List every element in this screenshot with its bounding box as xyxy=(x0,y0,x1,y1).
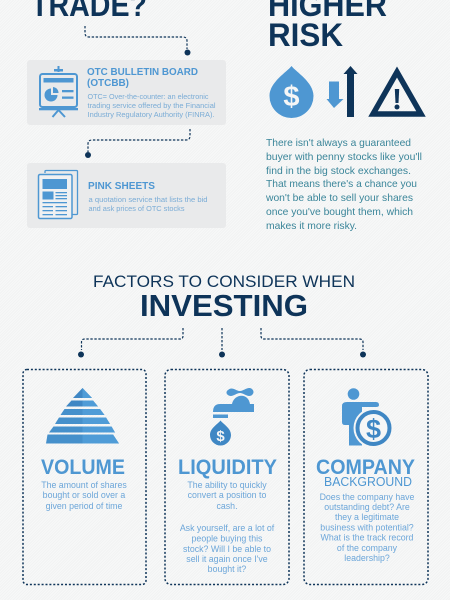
connector: investing to company xyxy=(261,328,366,358)
text: OTCBB description: Industry Regulatory Authority (FINRA). xyxy=(88,110,214,119)
text: liquidity description: The ability to quickly xyxy=(187,480,267,490)
text: higher risk description: makes it more risky. xyxy=(266,220,357,232)
text: higher risk description: once you've bought them, which xyxy=(266,206,413,218)
text: OTCBB title: (OTCBB) xyxy=(87,78,129,89)
text: liquidity description: Ask yourself, are a lot of xyxy=(180,523,275,533)
panel: pink sheets xyxy=(27,163,226,228)
panel: liquidity xyxy=(165,370,289,584)
text: OTCBB description: OTC= Over-the-counter: an electronic xyxy=(88,92,209,101)
icon: faucet with money drop xyxy=(210,388,254,446)
text: liquidity description: bought it? xyxy=(208,564,246,574)
icon: warning triangle xyxy=(373,72,421,114)
text: liquidity description: stock? Will I be able to xyxy=(183,544,271,554)
icon: businessman with coin xyxy=(342,388,394,448)
text: background subtitle: BACKGROUND xyxy=(324,474,412,489)
panel: company background xyxy=(304,370,428,584)
text: company description: leadership? xyxy=(344,553,390,563)
text: liquidity title: LIQUIDITY xyxy=(178,456,277,479)
text: liquidity description: convert a position to xyxy=(188,490,266,500)
text: higher risk description: buyer with penny stocks like you'll xyxy=(266,151,422,163)
text: OTCBB description: trading service offered by the Financial xyxy=(88,101,216,110)
icon: up arrow xyxy=(344,66,358,117)
text: volume description: given period of time xyxy=(46,501,122,511)
icon: money drop xyxy=(270,66,314,118)
text: company description: Does the company have xyxy=(320,492,415,502)
text: company description: What is the track record xyxy=(321,532,414,542)
icon: presentation board xyxy=(39,66,78,117)
text: OTCBB title: OTC BULLETIN BOARD xyxy=(87,67,198,78)
text: pink sheets description: a quotation service that lists the bid xyxy=(88,195,208,204)
panel: OTC bulletin board xyxy=(27,60,226,125)
text: volume description: bought or sold over a xyxy=(43,490,125,500)
icon: pyramid xyxy=(46,388,119,444)
icon: down arrow xyxy=(326,82,344,108)
text: pink sheets description: and ask prices of OTC stocks xyxy=(88,204,185,213)
icon: businessman with coin: $ xyxy=(366,414,381,444)
text: company description: outstanding debt? Are xyxy=(324,502,410,512)
text: company description: business with potential? xyxy=(320,522,414,532)
text: liquidity description: people buying this xyxy=(192,534,263,544)
connector: investing to liquidity xyxy=(219,328,225,358)
text: volume title: VOLUME xyxy=(41,456,125,479)
icon: faucet with money drop: $ xyxy=(216,428,225,445)
text: company description: they a legitimate xyxy=(335,512,399,522)
icon: money drop: $ xyxy=(283,81,300,113)
text: liquidity description: sell it again once I've xyxy=(186,554,268,564)
text: higher risk description: find in the big stock exchanges. xyxy=(266,165,411,177)
text: company title: COMPANY xyxy=(316,456,415,479)
connector: OTCBB to pink sheets xyxy=(85,129,190,158)
text: higher risk description: won't be able to sell your shares xyxy=(265,192,413,204)
text: pink sheets title: PINK SHEETS xyxy=(88,181,155,192)
text: volume description: The amount of shares xyxy=(41,480,127,490)
text: higher risk description: There isn't always a guaranteed xyxy=(266,137,411,149)
heading: investing: INVESTING xyxy=(140,288,308,323)
text: higher risk description: That means there's a chance you xyxy=(266,178,417,190)
heading: factors to consider: FACTORS TO CONSIDER WHEN xyxy=(93,272,355,291)
icon: newspaper xyxy=(38,170,78,218)
connector: investing to volume xyxy=(78,328,183,358)
text: company description: of the company xyxy=(337,543,398,553)
panel: volume xyxy=(23,370,146,584)
heading: higher risk: RISK xyxy=(268,17,343,53)
connector: trade to OTCBB xyxy=(85,26,190,56)
text: liquidity description: cash. xyxy=(216,501,238,511)
